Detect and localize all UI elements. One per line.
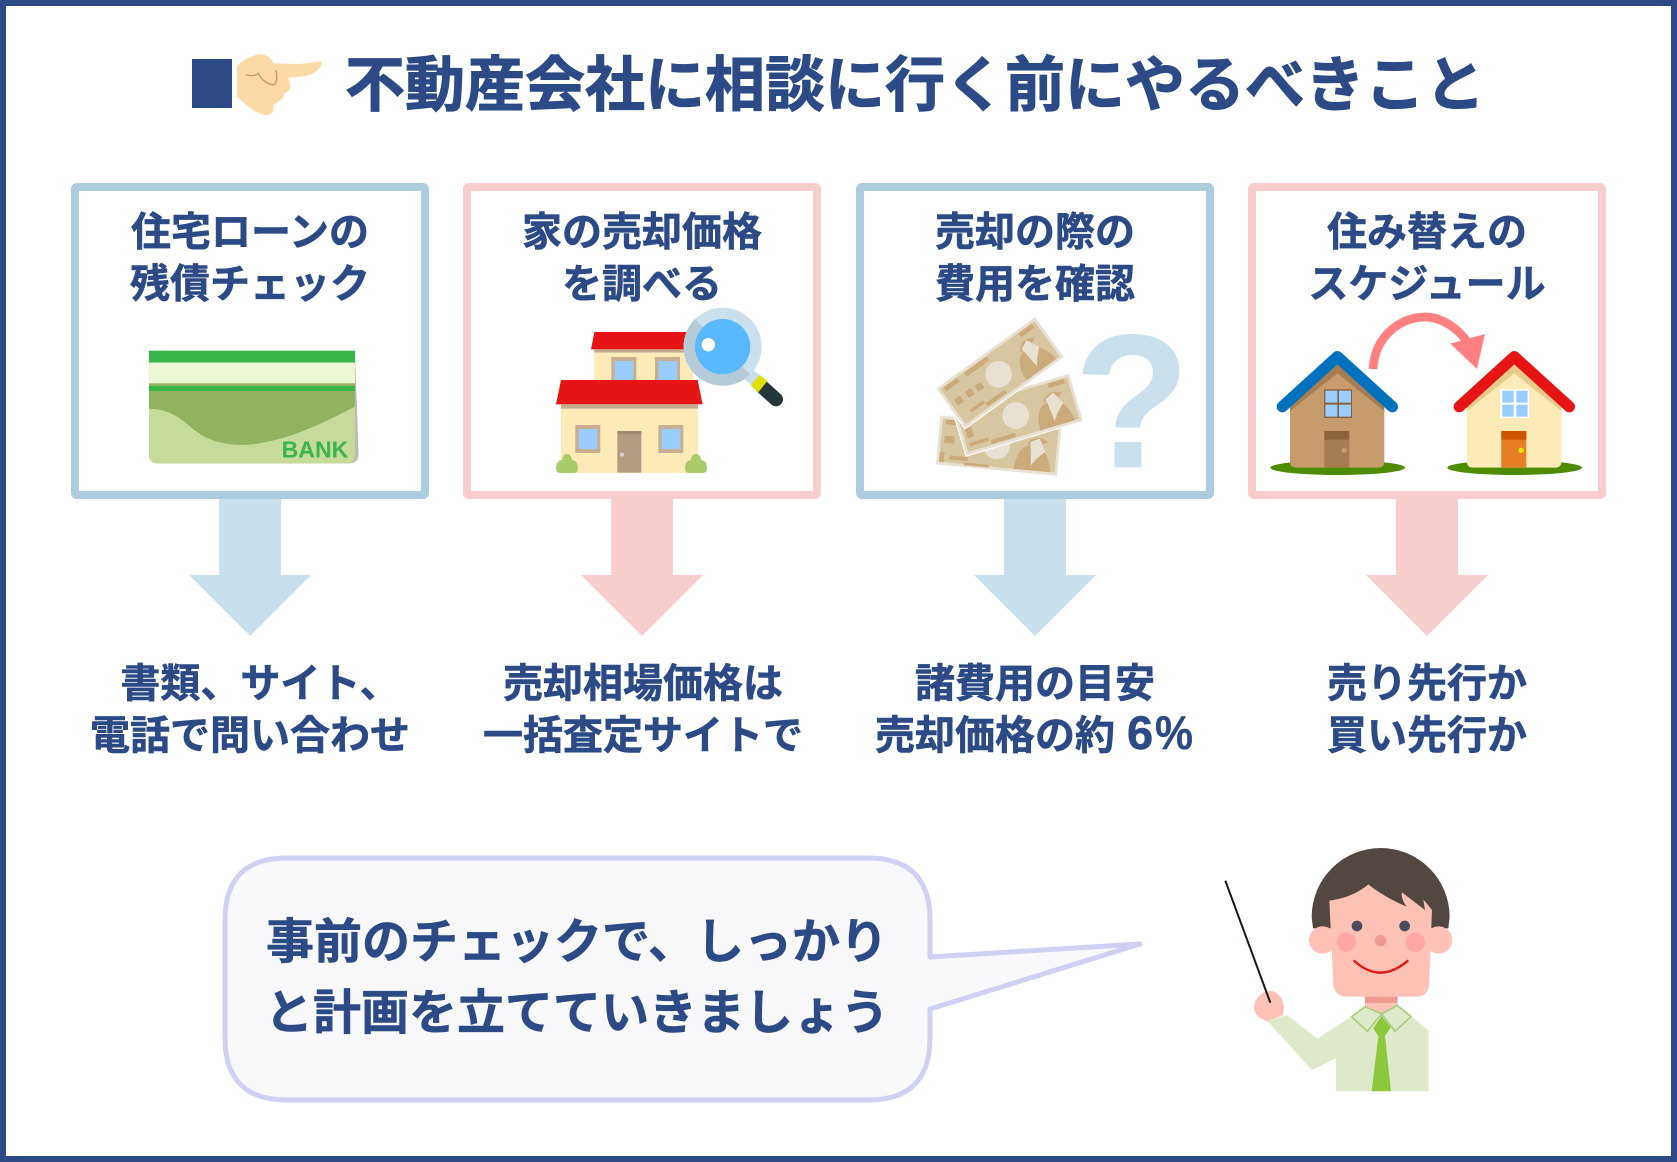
- heading: selling costs: 売却の際の: [935, 210, 1135, 254]
- icon: man with pointer: [1225, 848, 1452, 1091]
- icon: banknotes and question mark: [935, 295, 1190, 508]
- arrow: panel 3 down: [974, 499, 1096, 636]
- heading: moving schedule: 住み替えの: [1327, 210, 1527, 254]
- callout: speech bubble: [225, 858, 1140, 1100]
- icon: house with magnifier: [556, 308, 776, 473]
- text: inquiry methods: 電話で問い合わせ: [90, 714, 410, 758]
- text: market price: 一括査定サイトで: [483, 714, 803, 758]
- heading: sale price research: 家の売却価格: [522, 210, 762, 254]
- heading: selling costs: 費用を確認: [935, 262, 1135, 306]
- text: inquiry methods: 書類、サイト、: [120, 662, 400, 706]
- callout text: と計画を立てていきましょう: [265, 987, 889, 1040]
- panel: sale price research: [467, 187, 817, 495]
- heading: moving schedule: スケジュール: [1308, 262, 1546, 306]
- title: [192, 52, 1485, 119]
- arrow: panel 4 down: [1366, 499, 1488, 636]
- text: sell first or buy first: 売り先行か: [1327, 662, 1527, 706]
- panel: loan balance check: [75, 187, 425, 495]
- callout text: 事前のチェックで、しっかり: [266, 916, 888, 969]
- icon: blue square: [192, 59, 232, 108]
- icon: moving between two houses: [1270, 317, 1582, 475]
- arrow: panel 1 down: [189, 499, 311, 636]
- text: cost estimate: 6: [1127, 706, 1153, 759]
- icon: pointing hand: [237, 54, 322, 115]
- icon: bank passbook: [149, 351, 359, 463]
- icon: bank passbook: BANK: [282, 437, 348, 463]
- heading: sale price research: を調べる: [562, 262, 722, 306]
- panel: moving schedule: [1252, 187, 1602, 495]
- heading: loan balance check: 住宅ローンの: [131, 210, 369, 254]
- text: cost estimate: 売却価格の約: [875, 714, 1115, 758]
- icon: banknotes and question mark: ?: [1074, 295, 1190, 508]
- heading: loan balance check: 残債チェック: [130, 262, 370, 306]
- panel: selling costs: [860, 187, 1210, 508]
- text: market price: 売却相場価格は: [503, 662, 783, 706]
- text: cost estimate: 諸費用の目安: [915, 662, 1155, 706]
- arrow: panel 2 down: [581, 499, 703, 636]
- text: cost estimate: %: [1155, 706, 1193, 759]
- text: cost estimate: [875, 662, 1193, 759]
- text: sell first or buy first: 買い先行か: [1327, 714, 1527, 758]
- title text: 不動産会社に相談に行く前にやるべきこと: [345, 52, 1485, 119]
